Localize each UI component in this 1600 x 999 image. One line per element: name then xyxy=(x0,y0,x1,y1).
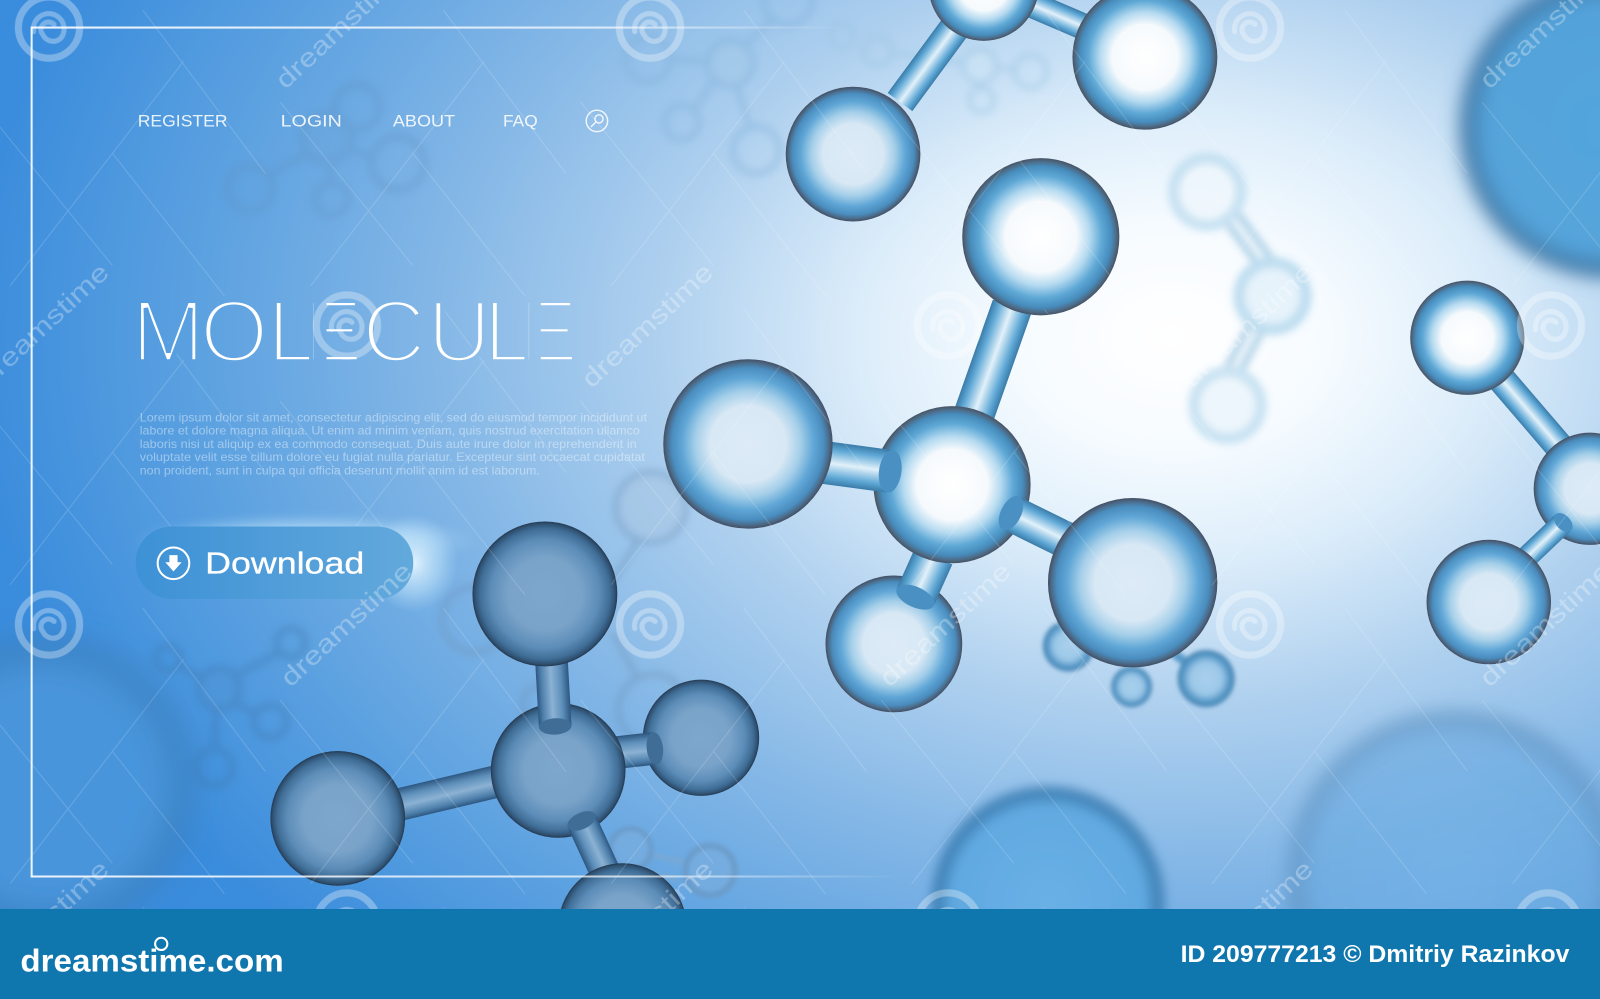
footer bar xyxy=(0,909,1600,999)
footer logo: dreamstime.com xyxy=(20,942,284,978)
content frame xyxy=(32,27,898,878)
body text: non proident, sunt in culpa qui officia deserunt mollit anim id est laborum. xyxy=(140,464,540,477)
download button xyxy=(133,514,480,612)
watermark text: dreamstime xyxy=(275,557,418,692)
ghost molecule: bottom xyxy=(610,829,735,895)
watermark text: dreamstime xyxy=(1176,855,1319,990)
ghost molecule: top left xyxy=(228,85,424,215)
watermark text: dreamstime xyxy=(576,855,719,990)
icon: search xyxy=(586,110,608,132)
navigation xyxy=(138,110,608,132)
nav: register: REGISTER xyxy=(138,112,228,131)
button label: Download xyxy=(205,546,364,580)
watermark text: dreamstime xyxy=(576,258,719,393)
molecule: lower left xyxy=(270,521,759,992)
body text xyxy=(140,411,648,477)
body text: laboris nisi ut aliquip ex ea commodo consequat. Duis aute irure dolor in reprehenderit in xyxy=(140,438,637,451)
molecule: centre xyxy=(663,158,1217,712)
title: MOLECULE xyxy=(132,283,578,381)
nav: about: ABOUT xyxy=(393,112,455,131)
nav: login: LOGIN xyxy=(281,112,342,131)
nav: faq: FAQ xyxy=(503,112,538,131)
body text: voluptate velit esse cillum dolore eu fugiat nulla pariatur. Excepteur sint occaecat cupidatat xyxy=(140,451,646,464)
molecule: top xyxy=(786,0,1217,221)
watermark text: dreamstime xyxy=(1474,557,1600,692)
watermark text: dreamstime xyxy=(1176,258,1319,393)
small molecule behind centre xyxy=(1043,620,1235,707)
ghost molecule: behind top right xyxy=(830,23,1047,112)
footer credit: ID 209777213 © Dmitriy Razinkov xyxy=(1181,941,1570,968)
molecule: right xyxy=(1410,281,1600,664)
ghost molecule: lower left xyxy=(156,629,305,786)
ghost molecule: lower centre xyxy=(442,472,688,744)
ghost molecule: top centre xyxy=(626,0,812,173)
watermark text: dreamstime xyxy=(874,557,1017,692)
body text: Lorem ipsum dolor sit amet, consectetur adipiscing elit, sed do eiusmod tempor incididunt ut xyxy=(140,411,648,424)
body text: labore et dolore magna aliqua. Ut enim ad minim veniam, quis nostrud exercitation ullamco xyxy=(140,425,640,438)
icon: download arrow xyxy=(158,547,189,579)
ghost molecule: upper right chain xyxy=(1173,158,1306,439)
